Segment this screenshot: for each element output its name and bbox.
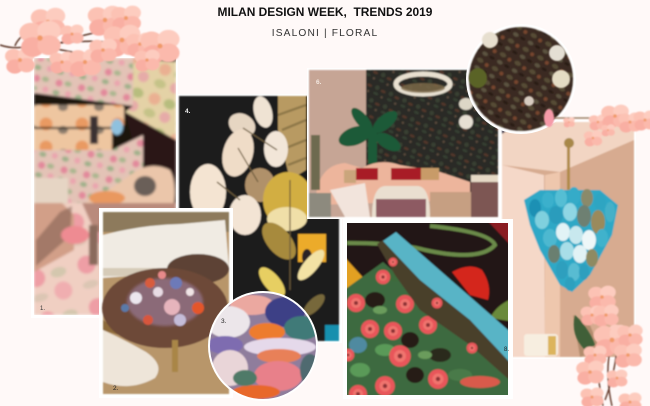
label 4: 4.: [185, 108, 191, 115]
label 3: 3.: [221, 318, 227, 325]
panel 1: floral boxes photo: [31, 55, 178, 318]
blossom branch: top right: [544, 105, 650, 146]
blossom branch: bottom right: [574, 286, 643, 406]
label 6: 6.: [316, 79, 322, 86]
blossom branch: top left: [0, 6, 180, 77]
panel 7: blue chandelier photo: [500, 120, 636, 359]
panel 2: floral table photo: [99, 208, 233, 398]
panel 4: disc lamp photo: [177, 94, 342, 343]
panel 6: living room photo: [307, 68, 500, 219]
subtitle: ISALONI | FLORAL: [272, 28, 378, 39]
top circle: wallpaper detail: [466, 24, 576, 134]
bottom circle: floral table detail: [206, 291, 320, 402]
label 2: 2.: [113, 385, 119, 392]
title: MILAN DESIGN WEEK, TRENDS 2019: [218, 5, 433, 19]
panel 8: rose fabric chair photo: [347, 219, 513, 395]
label 1: 1.: [40, 306, 45, 312]
label 8: 8.: [504, 347, 509, 353]
